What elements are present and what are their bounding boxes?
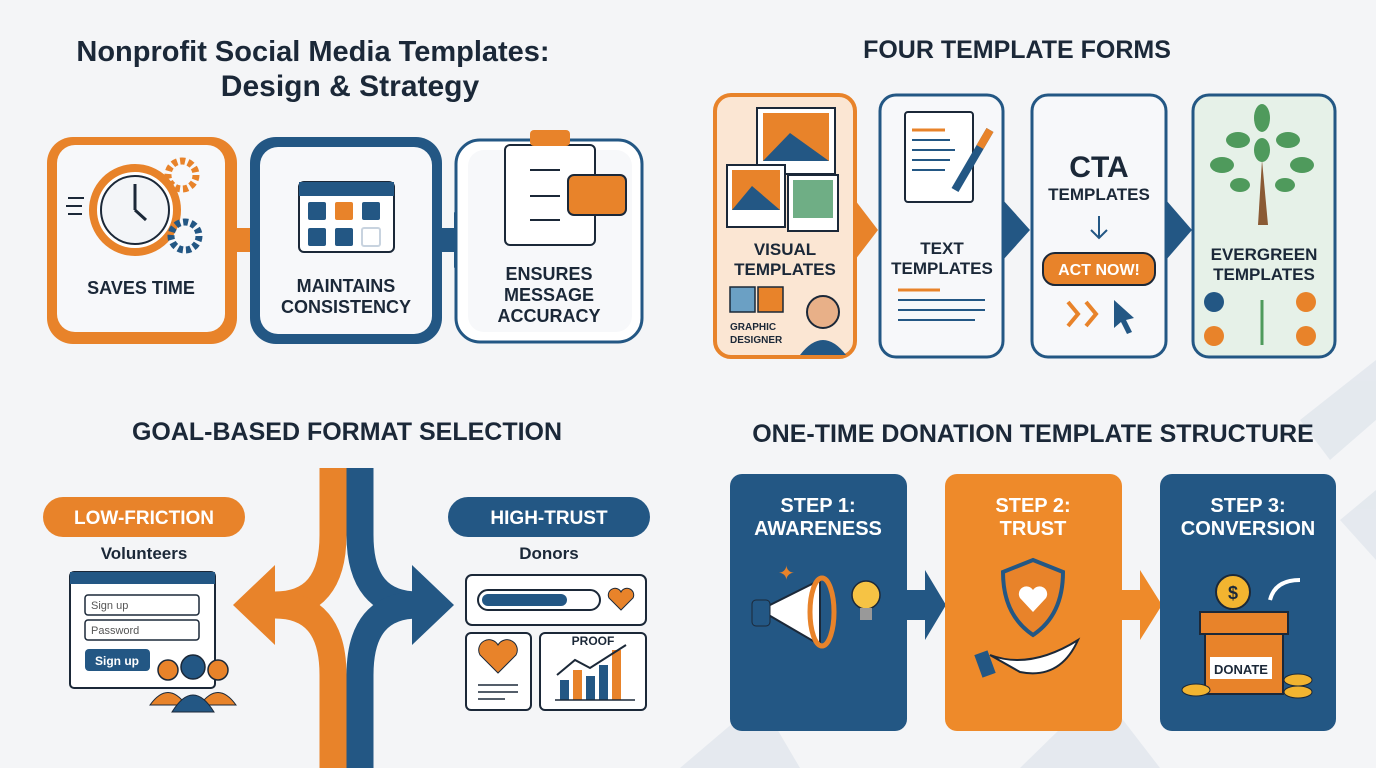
benefit card: accuracy: ENSURES — [505, 264, 593, 284]
arrow: cta to evergreen — [1166, 200, 1192, 260]
benefit card: saves time — [47, 137, 237, 344]
card: visual templates: TEMPLATES — [734, 260, 836, 279]
signup form — [70, 572, 236, 712]
step 2: TRUST — [1000, 518, 1066, 540]
benefit card: consistency: MAINTAINS — [297, 276, 395, 296]
signup form: Sign up — [95, 654, 139, 668]
background decoration — [680, 360, 1376, 768]
signup form: Password — [91, 625, 139, 637]
heading: goal-based: GOAL-BASED FORMAT SELECTION — [132, 418, 562, 446]
label: donors: Donors — [519, 544, 579, 563]
card: text templates — [880, 95, 1003, 357]
benefit card: consistency — [250, 137, 442, 344]
card: cta templates: ACT NOW! — [1058, 262, 1140, 279]
step 3: $ — [1228, 583, 1238, 603]
step 3: CONVERSION — [1181, 518, 1315, 540]
donor widgets: PROOF — [572, 634, 614, 648]
benefit card: saves time: SAVES TIME — [87, 278, 195, 298]
card: evergreen templates — [1193, 95, 1335, 357]
signup form: Sign up — [91, 600, 128, 612]
card: text templates: TEXT — [920, 239, 964, 258]
card: cta templates — [1032, 95, 1166, 357]
card: visual templates: GRAPHIC — [730, 322, 776, 333]
card: cta templates: CTA — [1069, 151, 1129, 184]
pill: high-trust — [448, 497, 650, 537]
card: visual templates — [715, 95, 855, 357]
benefit card: accuracy: ACCURACY — [498, 306, 600, 326]
pill: low-friction — [43, 497, 245, 537]
step 1: STEP 1: — [780, 495, 856, 517]
title — [76, 36, 550, 103]
benefit card: accuracy: MESSAGE — [504, 285, 594, 305]
arrow 2 — [442, 212, 476, 268]
step 1: ✦ — [778, 563, 795, 585]
card: visual templates: DESIGNER — [730, 335, 783, 346]
pill: low-friction: LOW-FRICTION — [74, 508, 214, 529]
diverging road — [275, 468, 418, 768]
card: visual templates: VISUAL — [754, 240, 816, 259]
step 1: AWARENESS — [754, 518, 882, 540]
arrow 1 — [237, 212, 276, 268]
arrow: visual to text — [855, 200, 878, 260]
card: cta templates: TEMPLATES — [1048, 185, 1150, 204]
arrowheads — [233, 565, 275, 645]
heading: four template forms: FOUR TEMPLATE FORMS — [863, 36, 1171, 64]
card: evergreen templates: EVERGREEN — [1211, 245, 1317, 264]
step 2: STEP 2: — [995, 495, 1071, 517]
step 3: DONATE — [1214, 662, 1268, 677]
step 3: STEP 3: — [1210, 495, 1286, 517]
arrow: step1 to step2 — [907, 570, 946, 640]
card: text templates: TEMPLATES — [891, 259, 993, 278]
card: evergreen templates: TEMPLATES — [1213, 265, 1315, 284]
title: Nonprofit Social Media Templates: — [76, 36, 550, 68]
arrow: step2 to step3 — [1122, 570, 1162, 640]
donor widgets — [466, 575, 646, 710]
heading: donation structure: ONE-TIME DONATION TEMPLATE STRUCTURE — [752, 420, 1314, 448]
benefit card: consistency: CONSISTENCY — [281, 297, 411, 317]
step 3 — [1160, 474, 1336, 731]
label: volunteers: Volunteers — [101, 544, 187, 563]
benefit card: accuracy — [456, 130, 642, 342]
arrow: text to cta — [1003, 200, 1030, 260]
title: Design & Strategy — [221, 70, 480, 103]
pill: high-trust: HIGH-TRUST — [490, 508, 608, 529]
step 2 — [945, 474, 1122, 731]
step 1 — [730, 474, 907, 731]
